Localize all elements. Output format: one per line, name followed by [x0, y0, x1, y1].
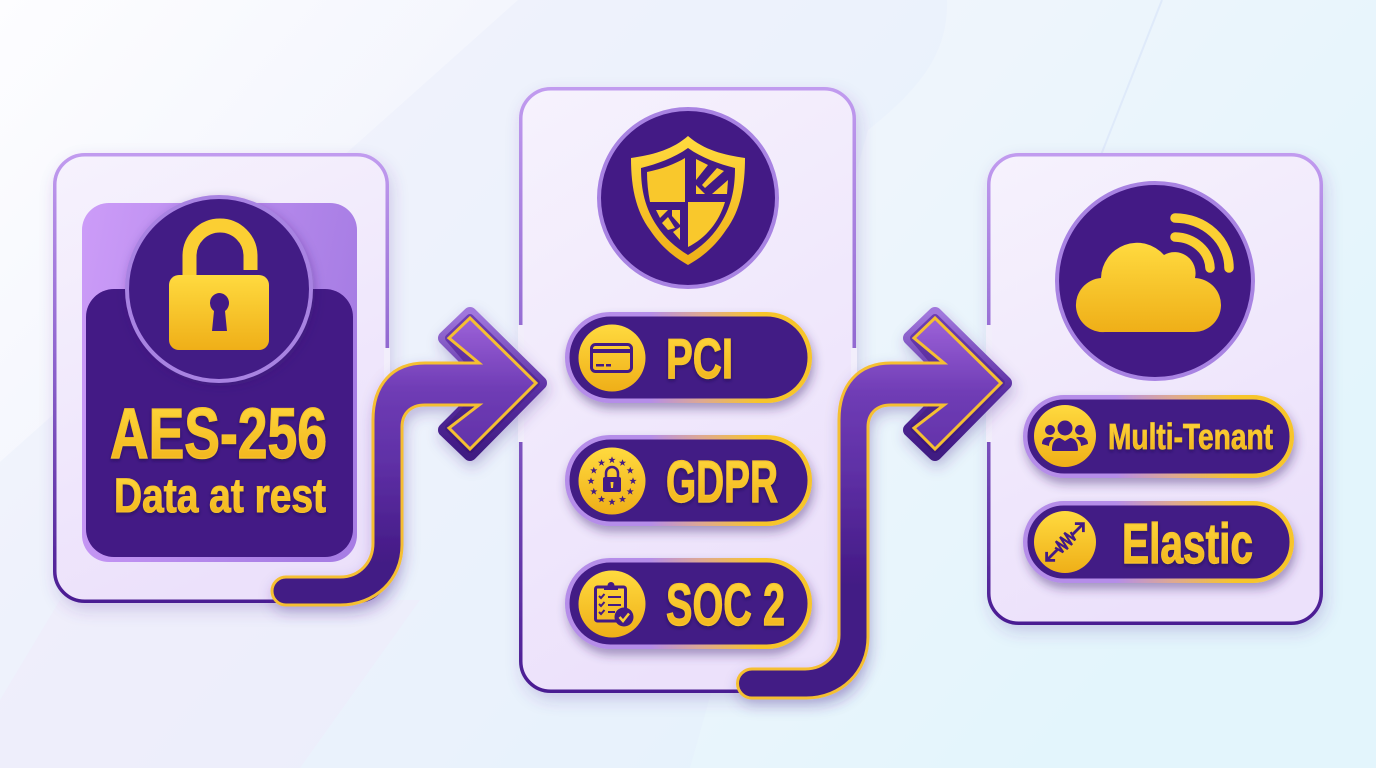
subheading: Data at rest: Data at rest [114, 470, 326, 523]
shield inner [641, 148, 735, 255]
icon: credit card [578, 324, 646, 392]
label: Multi-Tenant: Multi-Tenant [1108, 416, 1273, 457]
purple backing panel [82, 203, 357, 562]
panel: cloud [986, 155, 1321, 623]
dark text panel [86, 289, 353, 557]
badge: SOC 2 [567, 560, 810, 647]
icon: people [1034, 405, 1096, 467]
arrow head inner band [449, 318, 536, 449]
signal arcs [1175, 218, 1229, 268]
heading: AES-256: AES-256 [110, 395, 327, 474]
shackle [190, 225, 250, 282]
arrow body [738, 318, 1001, 698]
label: GDPR: GDPR [666, 449, 778, 515]
right border gap [851, 348, 857, 388]
panel: encryption at rest [55, 155, 390, 601]
icon circle: padlock [127, 197, 311, 381]
card background [521, 89, 854, 691]
badge: PCI [567, 314, 810, 401]
arrow: encryption to compliance [272, 314, 540, 605]
icon: audit clipboard [578, 570, 646, 638]
card background [989, 155, 1321, 623]
arrow head outer rim [445, 314, 540, 454]
icon circle: shield [599, 109, 777, 287]
shield outline [631, 136, 745, 265]
shield quadrants [647, 158, 728, 247]
border gap [384, 348, 390, 388]
badge: Elastic [1025, 503, 1292, 581]
icon circle: cloud with signal [1057, 183, 1253, 379]
icon: EU stars and lock [578, 448, 646, 514]
label: SOC 2: SOC 2 [666, 572, 785, 638]
badge: Multi-Tenant [1025, 397, 1292, 476]
icon: spring with arrows [1034, 511, 1096, 573]
panel: compliance [518, 89, 857, 691]
arrow head inner band [914, 318, 1001, 449]
border gap [986, 325, 992, 442]
card background [55, 155, 387, 601]
left border gap [518, 325, 524, 442]
cloud [1076, 243, 1221, 332]
lock body [169, 275, 269, 350]
label: PCI: PCI [666, 327, 733, 391]
arrow head outer rim [910, 314, 1005, 454]
arrow: compliance to cloud [738, 314, 1005, 698]
keyhole [210, 293, 229, 331]
arrow body [272, 318, 536, 605]
label: Elastic: Elastic [1122, 512, 1253, 576]
badge: GDPR [567, 437, 810, 524]
